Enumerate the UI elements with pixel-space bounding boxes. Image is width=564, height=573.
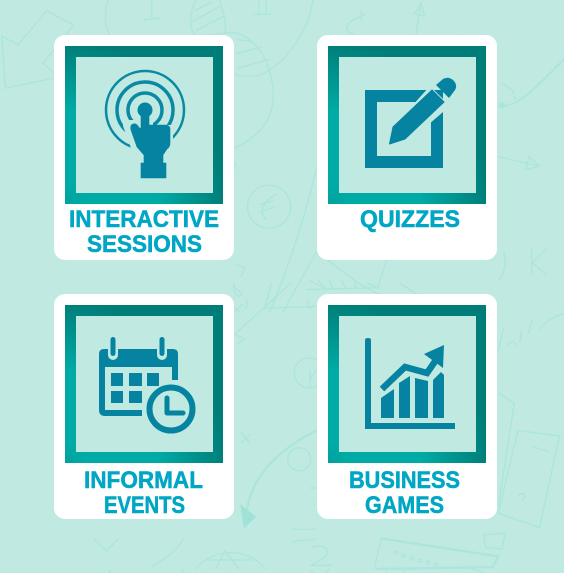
card: interactive sessions <box>54 35 234 260</box>
label: business games: BUSINESS <box>349 467 460 494</box>
icon frame <box>65 46 223 204</box>
icon: calendar with clock <box>99 333 192 430</box>
card: informal events <box>54 294 234 519</box>
card background <box>317 294 497 519</box>
label: interactive sessions: SESSIONS <box>87 231 202 258</box>
label: informal events: INFORMAL <box>84 467 203 494</box>
label: business games: GAMES <box>365 492 444 519</box>
label: informal events <box>84 467 203 519</box>
icon: pencil on checkbox <box>365 78 456 168</box>
label: interactive sessions: INTERACTIVE <box>69 206 219 233</box>
icon frame <box>328 46 486 204</box>
icon frame <box>328 305 486 463</box>
label: quizzes: QUIZZES <box>360 206 460 233</box>
icon frame <box>65 305 223 463</box>
label: informal events: EVENTS <box>104 492 185 519</box>
icon: rising bar chart with arrow <box>365 338 455 429</box>
label: interactive sessions <box>69 206 219 258</box>
card: business games <box>317 294 497 519</box>
card background <box>54 35 234 260</box>
card: quizzes <box>317 35 497 260</box>
icon: finger touching signal rings <box>106 71 184 178</box>
card background <box>54 294 234 519</box>
card background <box>317 35 497 260</box>
label: business games <box>349 467 460 519</box>
